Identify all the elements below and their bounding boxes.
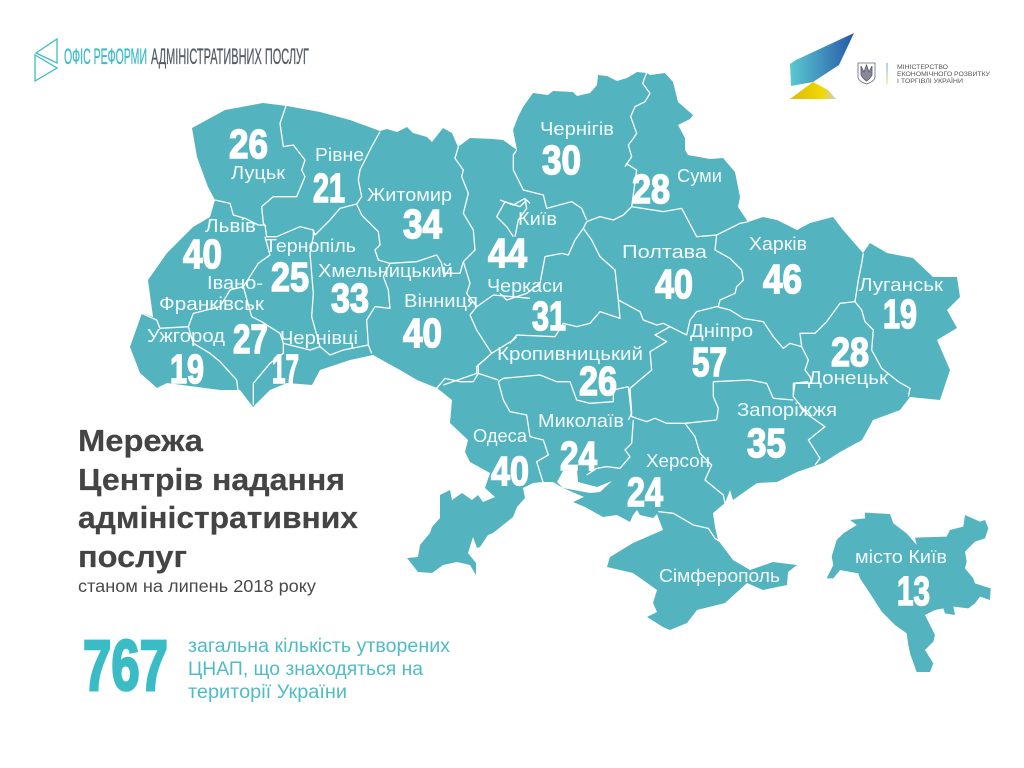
region: Черкаси bbox=[487, 275, 566, 339]
region: Запоріжжя: Запоріжжя bbox=[737, 399, 837, 420]
title: адміністративних bbox=[78, 500, 359, 535]
region: Кропивницький bbox=[497, 343, 643, 404]
region: Луганськ: 19 bbox=[883, 291, 917, 337]
map outline bbox=[130, 72, 960, 630]
region: Сімферополь: Сімферополь bbox=[659, 565, 780, 586]
region: Донецьк: 28 bbox=[831, 329, 869, 375]
region: Херсон: Херсон bbox=[646, 450, 710, 471]
title: послуг bbox=[78, 539, 187, 574]
total description bbox=[188, 636, 451, 703]
region: Ужгород: 19 bbox=[170, 346, 204, 392]
region: Херсон bbox=[627, 450, 710, 515]
region: Черкаси: 31 bbox=[532, 293, 566, 339]
region: Луцьк: 26 bbox=[229, 121, 268, 167]
region: Харків: Харків bbox=[749, 233, 807, 254]
region: Хмельницький bbox=[318, 260, 453, 321]
region: Ужгород bbox=[147, 325, 225, 392]
region: Луцьк bbox=[229, 121, 286, 183]
region: Дніпро bbox=[690, 320, 753, 385]
region: Херсон: 24 bbox=[627, 469, 663, 515]
logo: Міністерство економічного розвитку bbox=[790, 33, 991, 99]
title: Мережа bbox=[78, 423, 204, 458]
region: Вінниця: 40 bbox=[403, 310, 442, 356]
region: Київ: 44 bbox=[488, 230, 527, 276]
region: Івано-Франківськ: 27 bbox=[233, 316, 268, 362]
region: Вінниця: Вінниця bbox=[404, 290, 478, 311]
region: Житомир: Житомир bbox=[367, 184, 452, 205]
Dnipro estuary bbox=[557, 470, 612, 493]
region: Львів bbox=[183, 215, 256, 277]
region: Львів: Львів bbox=[205, 215, 256, 236]
region: Полтава: Полтава bbox=[622, 241, 708, 262]
Kyiv city shape bbox=[827, 513, 991, 672]
icon: blue ribbon bbox=[790, 33, 854, 86]
Azov spit gap bbox=[720, 513, 729, 519]
ministry name: МІНІСТЕРСТВО bbox=[897, 64, 948, 71]
region: Рівне: 21 bbox=[313, 165, 345, 211]
icon: triangles bbox=[35, 39, 57, 81]
total description: території України bbox=[188, 682, 347, 703]
region: Тернопіль bbox=[265, 235, 356, 300]
region: Полтава bbox=[622, 241, 708, 307]
region: Івано-Франківськ: Івано- bbox=[207, 272, 263, 293]
ministry name bbox=[897, 64, 991, 85]
region: Запоріжжя bbox=[737, 399, 837, 466]
region: Харків: 46 bbox=[763, 256, 802, 302]
region: Суми bbox=[632, 165, 722, 212]
text: АДМІНІСТРАТИВНИХ ПОСЛУГ bbox=[151, 44, 309, 69]
icon: yellow ribbon base bbox=[790, 82, 836, 99]
region: Чернігів: 30 bbox=[542, 137, 581, 183]
region: Івано-Франківськ: Франківськ bbox=[159, 293, 265, 314]
logo: Офіс реформи адміністративних послуг bbox=[35, 39, 309, 81]
region: Суми: Суми bbox=[677, 165, 722, 186]
region: Донецьк bbox=[808, 329, 889, 388]
region: Чернівці: 17 bbox=[272, 346, 299, 392]
region: Хмельницький: Хмельницький bbox=[318, 260, 453, 281]
region: Луганськ: Луганськ bbox=[859, 274, 944, 295]
logo: Офіс реформи адміністративних послуг: ОФІС РЕФОРМИ bbox=[64, 44, 147, 69]
region: Луганськ bbox=[859, 274, 944, 337]
region: Ужгород: Ужгород bbox=[147, 325, 225, 346]
region: Київ bbox=[488, 208, 557, 276]
region: Одеса bbox=[473, 425, 529, 494]
region: Одеса: Одеса bbox=[473, 425, 528, 446]
region: Суми: 28 bbox=[632, 166, 670, 212]
border Chernihiv Sumy north bbox=[625, 73, 650, 167]
region: Дніпро: Дніпро bbox=[690, 320, 753, 341]
region: Луцьк: Луцьк bbox=[231, 162, 286, 183]
region: Одеса: 40 bbox=[491, 448, 529, 494]
total description: загальна кількість утворених bbox=[188, 636, 451, 657]
region: Полтава: 40 bbox=[655, 261, 693, 307]
region: Рівне: Рівне bbox=[315, 144, 364, 165]
ministry name: І ТОРГІВЛІ УКРАЇНИ bbox=[897, 77, 963, 85]
subtitle: станом на липень 2018 року bbox=[78, 576, 316, 596]
region: Івано-Франківськ bbox=[159, 272, 268, 362]
total description: ЦНАП, що знаходяться на bbox=[188, 659, 423, 680]
region: Чернігів bbox=[540, 118, 614, 183]
region: Дніпро: 57 bbox=[692, 339, 727, 385]
Kyiv city label: місто Київ bbox=[855, 546, 947, 567]
icon: trident shield bbox=[858, 63, 875, 84]
region: Тернопіль: Тернопіль bbox=[265, 235, 356, 256]
region: Рівне bbox=[313, 144, 364, 211]
region: Донецьк: Донецьк bbox=[808, 367, 889, 388]
title: Центрів надання bbox=[78, 462, 345, 497]
region: Чернігів: Чернігів bbox=[540, 118, 614, 139]
region: Миколаїв: Миколаїв bbox=[538, 410, 624, 431]
divider line bbox=[886, 63, 888, 84]
region: Миколаїв bbox=[538, 410, 624, 479]
region borders south bbox=[437, 357, 825, 542]
region: Черкаси: Черкаси bbox=[487, 275, 563, 296]
region: Київ: Київ bbox=[518, 208, 557, 229]
Kyiv city number: 13 bbox=[897, 568, 930, 614]
region borders east bbox=[500, 150, 910, 420]
region: Вінниця bbox=[403, 290, 478, 356]
total number: 767 bbox=[83, 627, 168, 706]
map: Ukraine regions bbox=[130, 72, 960, 630]
region: Кропивницький: 26 bbox=[579, 358, 617, 404]
map: місто Київ bbox=[827, 513, 991, 672]
region: Хмельницький: 33 bbox=[331, 275, 369, 321]
title bbox=[78, 423, 359, 574]
region: Чернівці: Чернівці bbox=[280, 327, 358, 348]
region: Львів: 40 bbox=[183, 231, 222, 277]
region: Чернівці bbox=[272, 327, 358, 392]
region: Житомир bbox=[367, 184, 452, 247]
region: Кропивницький: Кропивницький bbox=[497, 343, 643, 364]
region: Житомир: 34 bbox=[403, 201, 442, 247]
ministry name: ЕКОНОМІЧНОГО РОЗВИТКУ bbox=[897, 71, 991, 78]
region: Тернопіль: 25 bbox=[271, 254, 309, 300]
region: Миколаїв: 24 bbox=[560, 433, 597, 479]
region borders west bbox=[142, 106, 530, 407]
region: Харків bbox=[749, 233, 807, 302]
region: Запоріжжя: 35 bbox=[747, 420, 786, 466]
